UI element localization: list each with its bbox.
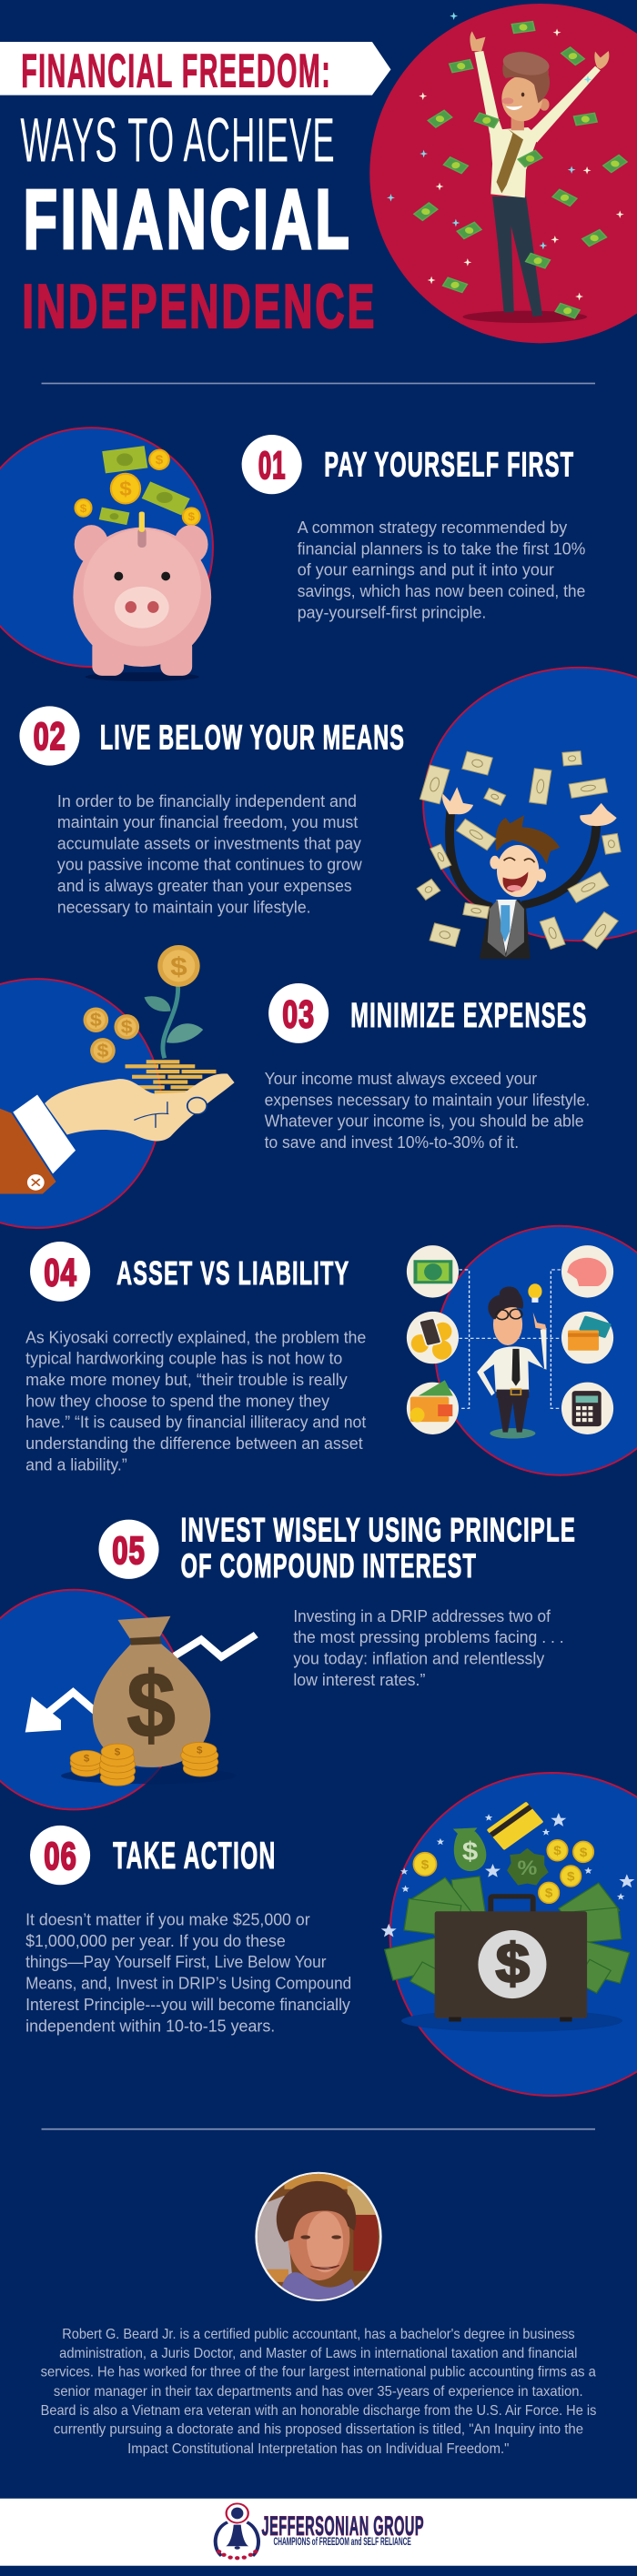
icon: briefcase with cash and coins: $ <box>567 1870 574 1884</box>
text block 03 <box>265 1070 590 1152</box>
text block 04: As Kiyosaki correctly explained, the problem the <box>25 1329 366 1347</box>
badge 03: 03 <box>282 992 315 1036</box>
text block 04: how they choose to spend the money they <box>25 1393 329 1411</box>
icon: man throwing cash in blue circle <box>417 668 637 959</box>
icon: hand holding coins and money plant <box>0 945 235 1228</box>
text block 04: make more money but, “their trouble is really <box>25 1371 348 1390</box>
sections 03 and 04 <box>0 945 637 1475</box>
text block 04: understanding the difference between an asset <box>25 1434 363 1454</box>
text block 01 <box>298 519 585 622</box>
icon: piggy bank in blue circle: $ <box>80 501 86 515</box>
badge 04: 04 <box>44 1251 77 1294</box>
text block 02: and is always greater than your expenses <box>57 878 352 896</box>
icon: piggy bank in blue circle: $ <box>188 510 195 523</box>
badge 03 <box>268 983 329 1043</box>
text block 01: A common strategy recommended by <box>298 519 568 538</box>
text block 05: the most pressing problems facing . . . <box>293 1629 564 1647</box>
text block 02: accumulate assets or investments that pay <box>57 835 361 853</box>
icon: hand holding coins and money plant: $ <box>170 951 187 981</box>
logo emblem <box>216 2503 258 2560</box>
heading 05 <box>181 1512 576 1585</box>
divider <box>42 383 595 384</box>
section: author and footer <box>0 2128 637 2566</box>
author portrait <box>252 2170 386 2304</box>
divider <box>42 2128 595 2130</box>
icon: money bag with arrows <box>0 1590 256 1809</box>
icon: piggy bank in blue circle <box>0 428 213 681</box>
icon: piggy bank in blue circle: $ <box>156 454 163 468</box>
icon: money bag with arrows: $ <box>84 1754 90 1765</box>
text block 06: It doesn’t matter if you make $25,000 or <box>25 1911 310 1930</box>
red circle with celebrating man <box>369 4 637 343</box>
text block 05: low interest rates.” <box>293 1672 425 1690</box>
text block 05: Investing in a DRIP addresses two of <box>293 1608 551 1626</box>
badge 05 <box>98 1520 159 1579</box>
section: author and footer: CHAMPIONS of FREEDOM and SELF RELIANCE <box>273 2535 411 2547</box>
sections 05 and 06 <box>0 1512 637 2096</box>
icon: briefcase with cash and coins: $ <box>462 1837 479 1867</box>
badge 06: 06 <box>44 1836 77 1878</box>
text block 04: and a liability.” <box>25 1456 127 1474</box>
icon: briefcase with cash and coins: $ <box>553 1845 561 1858</box>
icon: hand holding coins and money plant: $ <box>96 1040 108 1061</box>
icon: briefcase with cash and coins: % <box>518 1857 537 1879</box>
footer band <box>0 2499 637 2566</box>
badge 05: 05 <box>112 1530 146 1573</box>
text block 06 <box>25 1911 351 2036</box>
heading 06: TAKE ACTION <box>113 1835 277 1877</box>
badge 02 <box>19 706 80 766</box>
icon: briefcase with cash and coins <box>381 1773 637 2096</box>
text block 06: $1,000,000 per year. If you do these <box>25 1933 286 1951</box>
text block 01: financial planners is to take the first 10% <box>298 540 585 558</box>
text block 02 <box>57 793 362 917</box>
text block 06: things—Pay Yourself First, Live Below Your <box>25 1954 327 1972</box>
icon: hand holding coins and money plant: $ <box>121 1016 133 1037</box>
text block 05 <box>293 1608 564 1690</box>
icon: briefcase with cash and coins: $ <box>421 1858 429 1872</box>
badge 02: 02 <box>34 716 66 759</box>
heading 02: LIVE BELOW YOUR MEANS <box>100 719 405 757</box>
text block 04: have.” “It is caused by financial illiteracy and not <box>25 1414 367 1432</box>
text block 02: In order to be financially independent and <box>57 793 357 811</box>
text block 01: of your earnings and put it into your <box>298 561 554 579</box>
text block 04 <box>25 1329 367 1474</box>
text block 05: you today: inflation and relentlessly <box>293 1650 545 1668</box>
badge 04 <box>30 1242 90 1302</box>
text block 06: Means, and, Invest in DRIP’s Using Compound <box>25 1975 351 1993</box>
text block 01: pay-yourself-first principle. <box>298 604 486 622</box>
icon: briefcase with cash and coins: $ <box>580 1846 587 1860</box>
sections 01 and 02 <box>0 428 637 959</box>
badge 01: 01 <box>258 445 286 488</box>
text block 06: independent within 10-to-15 years. <box>25 2018 275 2036</box>
title banner <box>0 42 390 97</box>
icon: briefcase with cash and coins: $ <box>496 1932 530 1995</box>
text block 02: you passive income that continues to grow <box>57 856 362 875</box>
text block 02: necessary to maintain your lifestyle. <box>57 899 311 917</box>
heading 04: ASSET VS LIABILITY <box>116 1255 349 1292</box>
text block 03: to save and invest 10%-to-30% of it. <box>265 1133 519 1152</box>
author biography: Impact Constitutional Interpretation has on Individual Freedom." <box>127 2440 509 2456</box>
text block 01: savings, which has now been coined, the <box>298 583 585 601</box>
icon: money bag with arrows: $ <box>126 1653 176 1756</box>
text block 04: typical hardworking couple has is not how to <box>25 1350 342 1368</box>
icon: piggy bank in blue circle: $ <box>119 478 132 500</box>
text block 02: maintain your financial freedom, you must <box>57 814 359 832</box>
icon: briefcase with cash and coins: $ <box>545 1887 552 1901</box>
text block 06: Interest Principle---you will become financially <box>25 1997 350 2015</box>
icon: hand holding coins and money plant: $ <box>90 1010 102 1031</box>
icon: man with asset and liability icons <box>407 1226 637 1475</box>
badge 01 <box>242 435 302 494</box>
icon: money bag with arrows: $ <box>115 1747 121 1757</box>
text block 03: Your income must always exceed your <box>265 1070 537 1089</box>
icon: money bag with arrows: $ <box>197 1746 203 1756</box>
logo: Jeffersonian Group <box>216 2503 424 2560</box>
section: header <box>0 4 637 384</box>
author biography <box>41 2326 596 2456</box>
badge 06 <box>30 1826 90 1885</box>
